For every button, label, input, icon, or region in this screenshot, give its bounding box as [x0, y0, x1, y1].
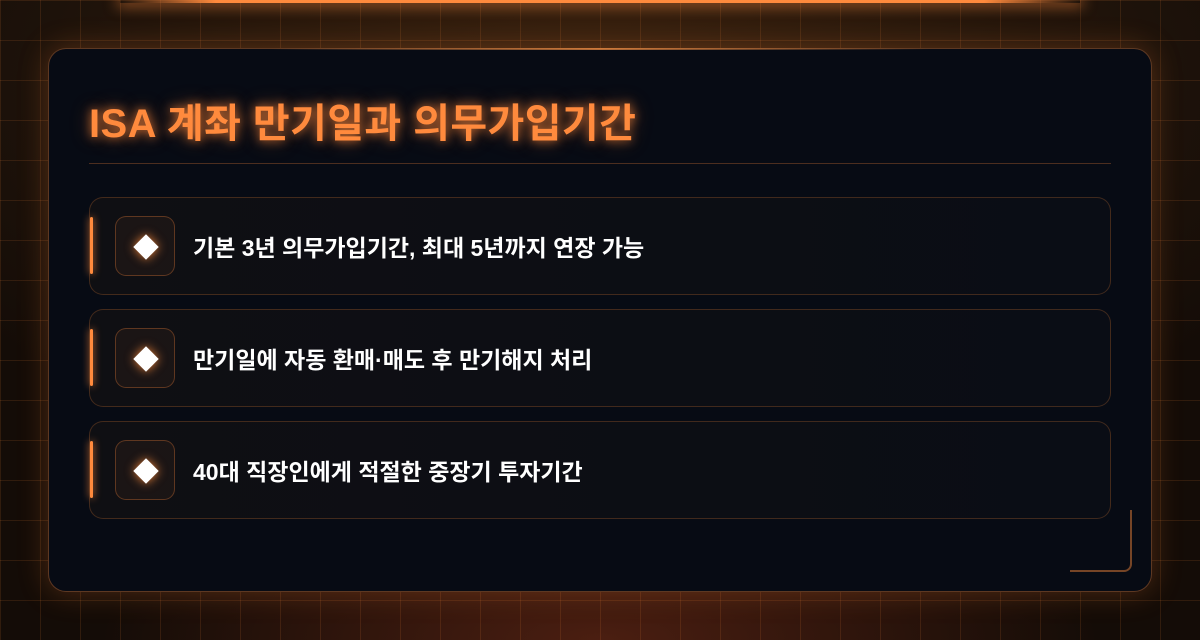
text 1: 기본 3년 의무가입기간, 최대 5년까지 연장 가능	[193, 235, 644, 261]
item 1	[89, 197, 1111, 295]
text 3: 40대 직장인에게 적절한 중장기 투자기간	[193, 459, 583, 485]
icon: diamond	[115, 216, 175, 276]
title: ISA 계좌 만기일과 의무가입기간	[89, 102, 636, 146]
text 2: 만기일에 자동 환매·매도 후 만기해지 처리	[193, 347, 592, 373]
icon: diamond	[115, 328, 175, 388]
item 3	[89, 421, 1111, 519]
panel: main card	[48, 48, 1152, 592]
icon: diamond	[115, 440, 175, 500]
item 2	[89, 309, 1111, 407]
